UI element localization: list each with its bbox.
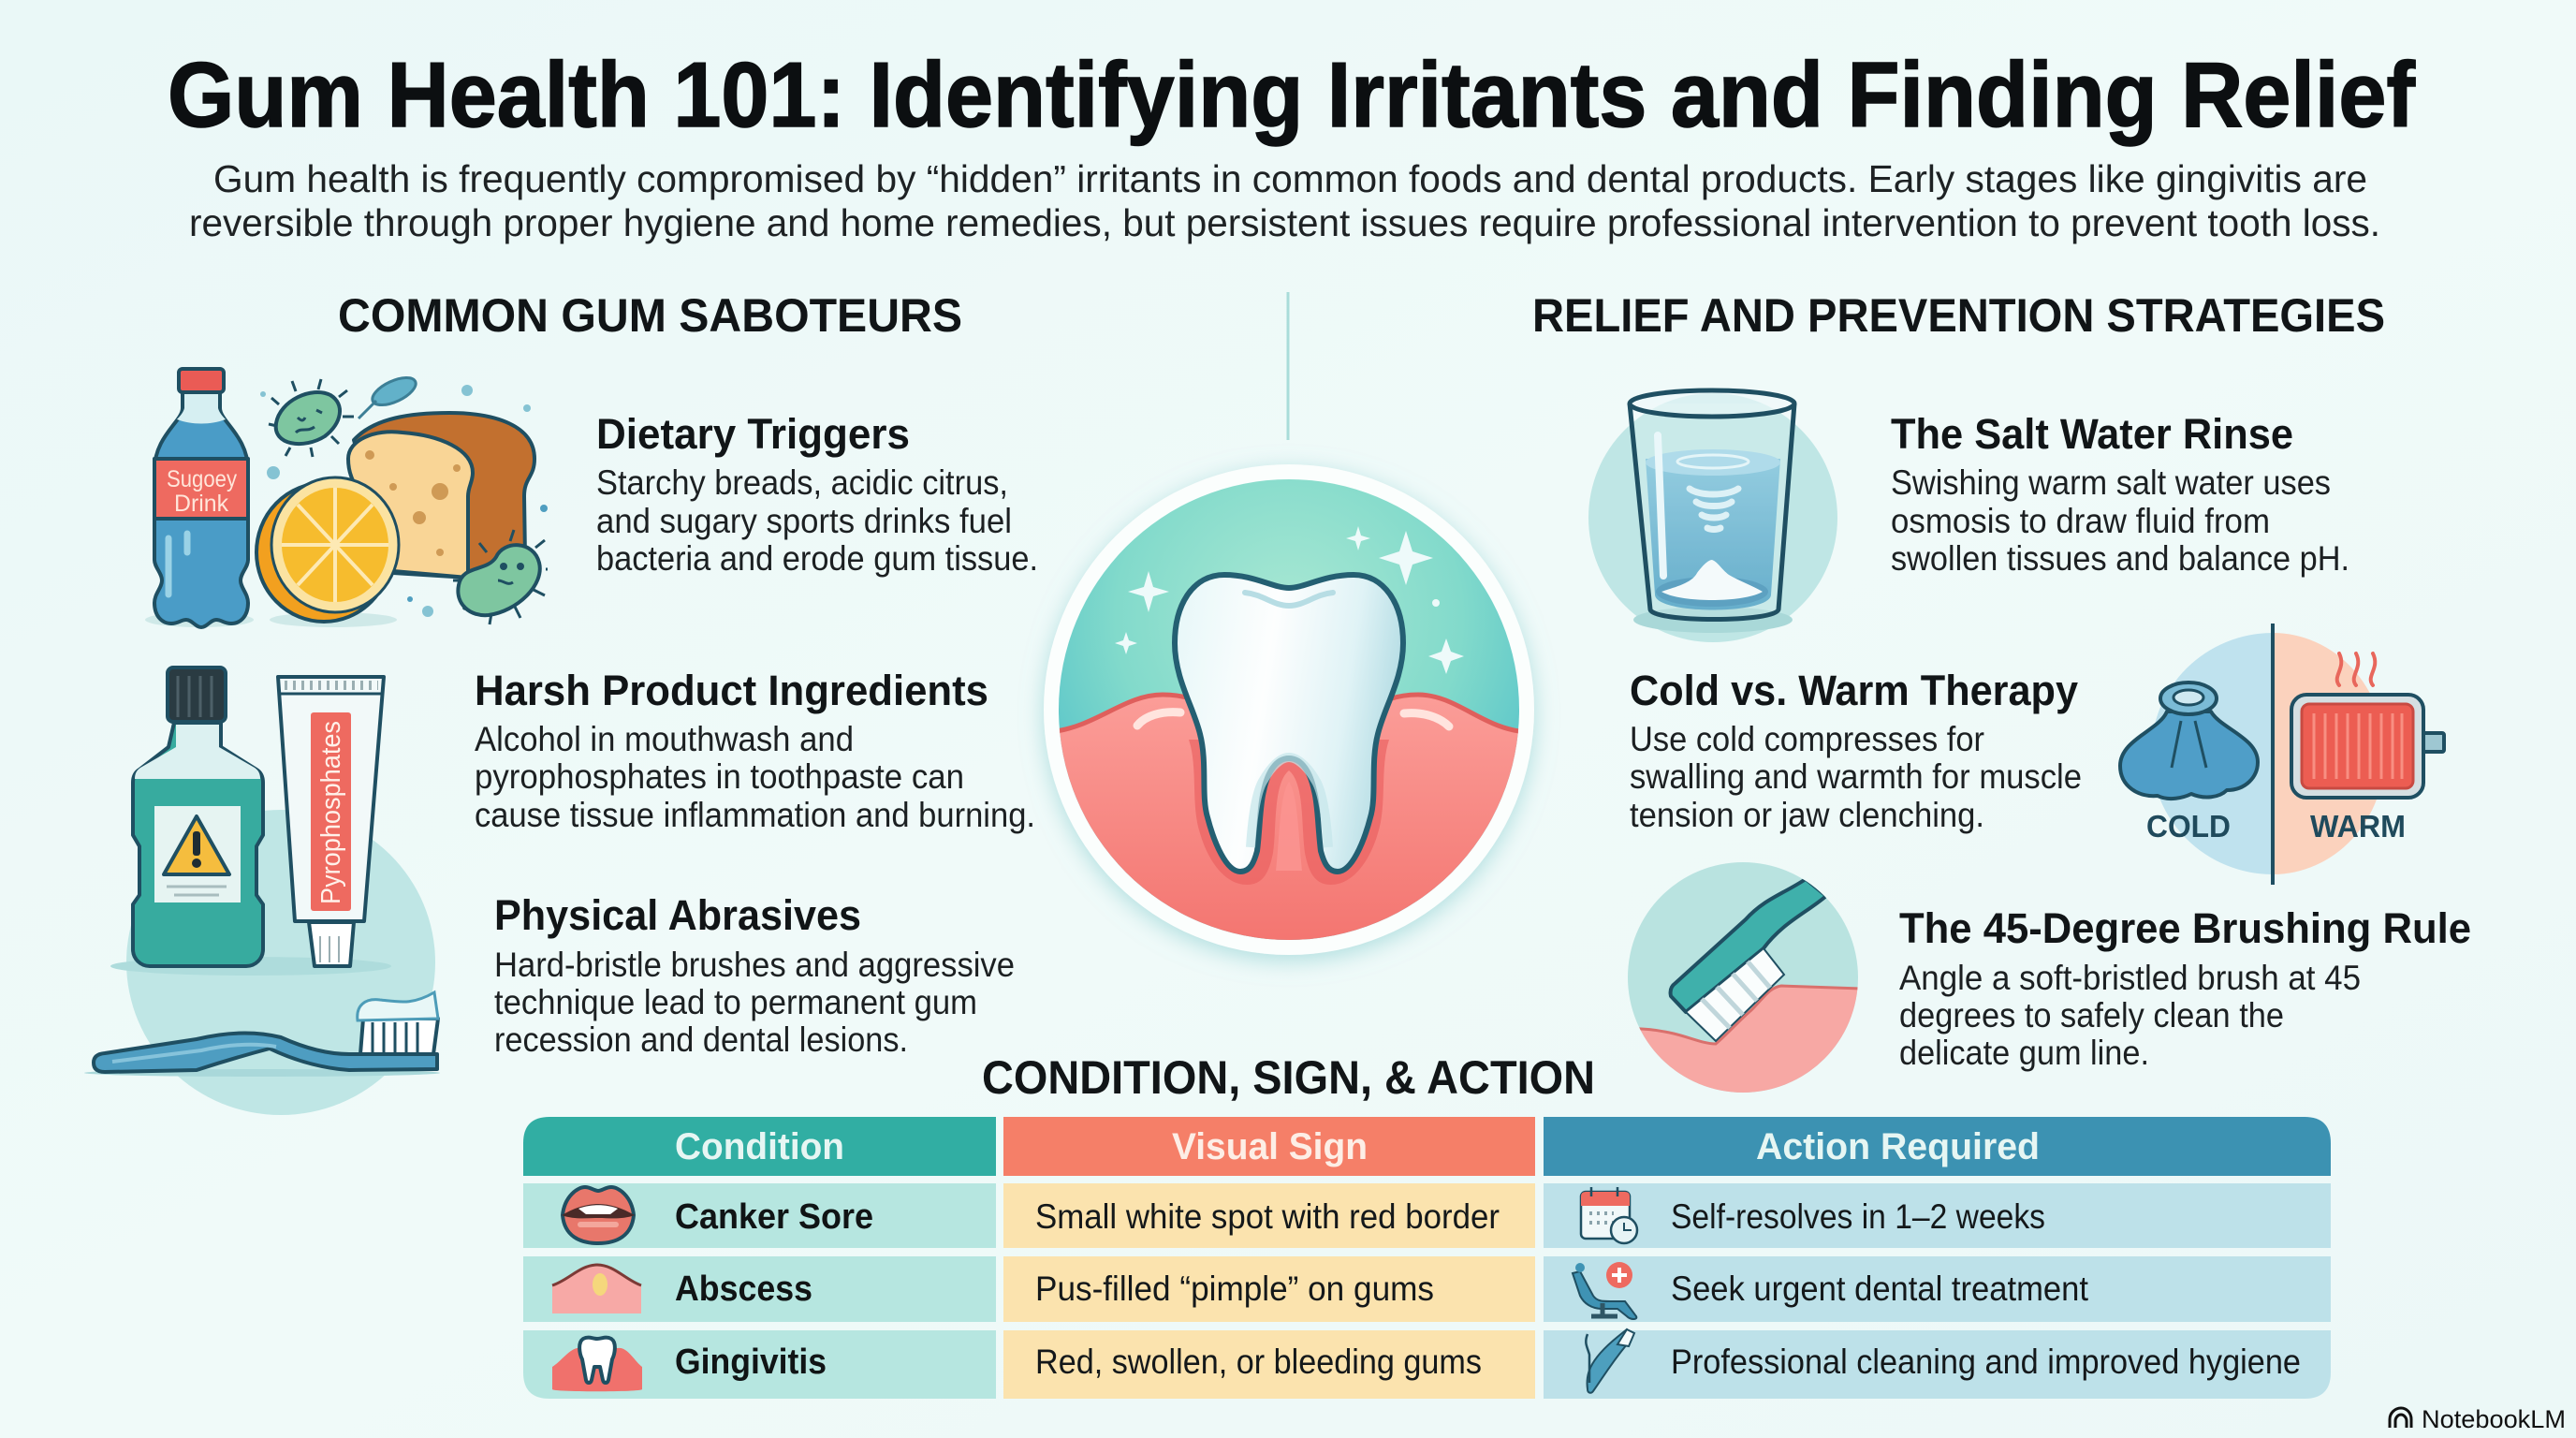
intro paragraph: Gum health is frequently compromised by “hidden” irritants in common foods and dental products. Early stages like gingivitis are xyxy=(213,157,2367,200)
icon: calendar and clock xyxy=(1581,1187,1637,1243)
column: visual sign xyxy=(1003,1117,1535,1399)
text: salt water rinse: swollen tissues and balance pH. xyxy=(1891,539,2349,578)
text: cold vs warm therapy: swalling and warmth for muscle xyxy=(1630,757,2082,796)
heading: condition, sign and action: CONDITION, SIGN, & ACTION xyxy=(982,1051,1595,1104)
icon: citrus slice xyxy=(256,477,399,622)
central tooth medallion xyxy=(1044,464,1534,957)
icon: 45-degree brushing xyxy=(1624,862,1863,1095)
text: 45-degree brushing rule: degrees to safely clean the xyxy=(1899,996,2284,1034)
icon: mouthwash bottle xyxy=(110,668,391,976)
icon: heating pad xyxy=(2291,653,2444,798)
heading: relief and prevention strategies: RELIEF AND PREVENTION STRATEGIES xyxy=(1532,289,2385,342)
column: condition xyxy=(523,1117,996,1399)
text: 45-degree brushing rule: Angle a soft-bristled brush at 45 xyxy=(1899,959,2361,997)
text: physical abrasives: Hard-bristle brushes and aggressive xyxy=(494,946,1015,984)
icon: bacteria top xyxy=(269,379,354,457)
icon: gingivitis tooth xyxy=(552,1338,642,1391)
text: 45-degree brushing rule: delicate gum line. xyxy=(1899,1034,2149,1072)
text: cold vs warm therapy: Use cold compresses for xyxy=(1630,720,1984,758)
heading: common gum saboteurs: COMMON GUM SABOTEURS xyxy=(338,289,962,342)
text: dietary triggers: bacteria and erode gum tissue. xyxy=(596,539,1038,578)
column: condition: Canker Sore xyxy=(675,1197,873,1237)
column: condition: Condition xyxy=(675,1126,844,1167)
text: dietary triggers xyxy=(596,410,1038,578)
icon: lips xyxy=(562,1187,635,1243)
icon: sparkles xyxy=(1115,526,1464,674)
text: cold vs warm therapy: tension or jaw clenching. xyxy=(1630,796,1984,834)
text: 45-degree brushing rule xyxy=(1899,904,2471,1072)
intro paragraph: reversible through proper hygiene and home remedies, but persistent issues require professional intervention to prevent tooth loss. xyxy=(189,201,2380,244)
text: cold vs warm therapy: Cold vs. Warm Therapy xyxy=(1630,667,2078,714)
icon: tooth xyxy=(1175,575,1403,872)
icon: salt water glass xyxy=(1588,390,1837,642)
column: action required: Self-resolves in 1–2 weeks xyxy=(1671,1197,2045,1236)
icon: toothpaste tube xyxy=(278,677,384,966)
text: physical abrasives xyxy=(494,891,1015,1059)
column: action required: Professional cleaning and improved hygiene xyxy=(1671,1343,2301,1381)
text: physical abrasives: technique lead to permanent gum xyxy=(494,983,977,1021)
text: physical abrasives: recession and dental lesions. xyxy=(494,1020,908,1059)
icon: blue microbe and droplets xyxy=(260,372,548,617)
text: dietary triggers: Starchy breads, acidic citrus, xyxy=(596,463,1008,502)
text: salt water rinse: osmosis to draw fluid from xyxy=(1891,502,2270,540)
text: physical abrasives: Physical Abrasives xyxy=(494,891,861,939)
icon: ice bag xyxy=(2120,682,2258,799)
column: visual sign: Pus-filled “pimple” on gums xyxy=(1035,1269,1434,1308)
icon: bread loaf xyxy=(348,413,534,578)
column: visual sign: Visual Sign xyxy=(1172,1126,1368,1167)
icon: cold and warm therapy: WARM xyxy=(2310,809,2406,844)
column: condition: Gingivitis xyxy=(675,1343,827,1382)
icon: sports drink bottle xyxy=(154,369,248,627)
text: dietary triggers: and sugary sports drinks fuel xyxy=(596,502,1012,540)
table: condition, sign, action xyxy=(523,1117,2331,1399)
title: Gum Health 101: Identifying Irritants and Finding Relief xyxy=(168,43,2415,146)
text: dietary triggers: Dietary Triggers xyxy=(596,410,910,458)
text: cold vs warm therapy xyxy=(1630,667,2082,834)
text: salt water rinse: Swishing warm salt water uses xyxy=(1891,463,2331,502)
column: action required xyxy=(1544,1117,2331,1399)
icon: toothpaste tube: Pyrophosphates xyxy=(316,721,346,904)
column: action required: Action Required xyxy=(1756,1126,2040,1167)
text: harsh product ingredients xyxy=(475,667,1035,834)
logo: NotebookLM: NotebookLM xyxy=(2422,1405,2566,1433)
column: visual sign: Red, swollen, or bleeding gums xyxy=(1035,1343,1482,1381)
backdrop circle behind products xyxy=(126,810,435,1115)
text: harsh product ingredients: pyrophosphates in toothpaste can xyxy=(475,757,964,796)
text: harsh product ingredients: Alcohol in mouthwash and xyxy=(475,720,854,758)
icon: abscess xyxy=(552,1265,641,1313)
icon: cold and warm therapy xyxy=(2120,624,2444,885)
column: visual sign: Small white spot with red border xyxy=(1035,1197,1500,1236)
text: salt water rinse xyxy=(1891,410,2349,578)
icon: bacteria bottom xyxy=(453,530,548,624)
text: harsh product ingredients: Harsh Product Ingredients xyxy=(475,667,988,714)
icon: sports drink bottle: Drink xyxy=(174,491,228,517)
column: action required: Seek urgent dental treatment xyxy=(1671,1269,2089,1308)
icon: dietary triggers illustration xyxy=(145,369,548,627)
text: salt water rinse: The Salt Water Rinse xyxy=(1891,410,2293,458)
text: harsh product ingredients: cause tissue inflammation and burning. xyxy=(475,796,1035,834)
column: condition: Abscess xyxy=(675,1269,812,1309)
icon: sports drink bottle: Sugoey xyxy=(167,466,237,492)
icon: dental chair xyxy=(1573,1262,1636,1319)
icon: hard-bristle toothbrush xyxy=(84,992,440,1077)
icon: cold and warm therapy: COLD xyxy=(2146,809,2231,844)
intro paragraph xyxy=(189,157,2380,244)
icon: dental tools xyxy=(1586,1329,1634,1393)
text: 45-degree brushing rule: The 45-Degree Brushing Rule xyxy=(1899,904,2471,952)
